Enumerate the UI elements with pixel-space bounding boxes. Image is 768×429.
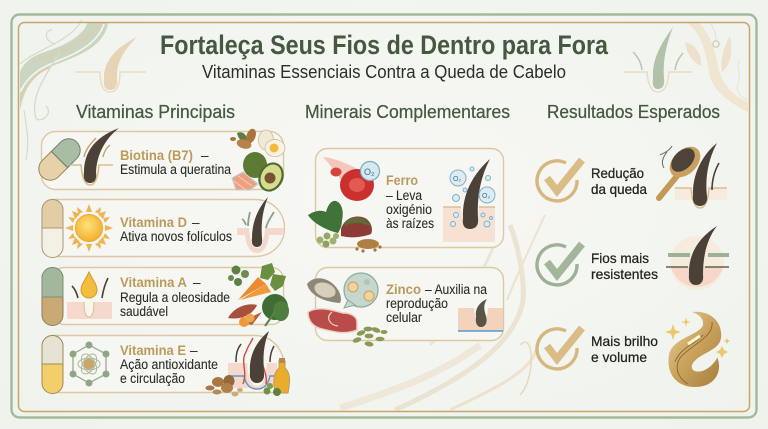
heading: minerais complementares: Minerais Complementares xyxy=(305,102,510,122)
text: vitamina e: e circulação xyxy=(120,371,185,386)
title: Fortaleça Seus Fios de Dentro para Fora xyxy=(160,30,609,60)
icon: pumpkin seeds xyxy=(352,326,388,347)
text: zinco xyxy=(386,281,487,325)
text: vitamina d xyxy=(120,214,232,244)
text: vitamina a: saudável xyxy=(120,304,168,319)
icon: hair growth xyxy=(70,128,119,185)
text: Fios mais xyxy=(591,250,649,266)
text: biotina: Estimula a queratina xyxy=(120,162,231,177)
icon: follicle with oxygen: O₂ xyxy=(482,193,490,200)
text xyxy=(591,165,647,197)
icon: capsule xyxy=(34,134,85,185)
icon: foods biotina xyxy=(230,127,287,194)
icon: molecule xyxy=(70,342,110,386)
text: vitamina a: Regula a oleosidade xyxy=(120,290,230,305)
panel: vitamina d xyxy=(42,197,284,258)
result: fios mais resistentes xyxy=(537,226,729,290)
icon: gold check xyxy=(537,328,582,369)
heading: resultados esperados: Resultados Esperados xyxy=(547,102,720,122)
icon: iron foods xyxy=(308,201,382,253)
icon: green check xyxy=(537,244,582,285)
text: ferro xyxy=(386,172,434,231)
result: reducao da queda xyxy=(537,141,727,208)
icon: follicle with oxygen xyxy=(443,159,495,242)
result: mais brilho e volume xyxy=(537,312,730,387)
icon: hair brush xyxy=(659,141,706,198)
text: vitamina e xyxy=(120,342,218,386)
icon: capsule xyxy=(42,336,63,394)
icon: shiny hair xyxy=(668,312,721,387)
icon: scalp circulation xyxy=(228,331,277,389)
text: vitamina d: Vitamina D xyxy=(120,214,187,230)
text: vitamina e: – xyxy=(190,343,198,358)
panel: zinco xyxy=(307,268,504,347)
text: vitamina e: Vitamina E xyxy=(120,342,186,358)
text: biotina: Biotina (B7) xyxy=(120,147,193,163)
icon: oil drop xyxy=(67,272,112,319)
icon: cells bubble xyxy=(344,273,378,308)
text: vitamina d: Ativa novos folículos xyxy=(120,229,232,244)
text: Mais brilho xyxy=(591,333,658,349)
icon: nuts and oil xyxy=(206,358,290,396)
text: vitamina a xyxy=(120,274,230,319)
icon: capsule xyxy=(42,268,63,326)
text: ferro: Ferro xyxy=(386,172,418,188)
text: zinco: reprodução xyxy=(386,296,448,311)
panel: biotina xyxy=(34,127,287,194)
icon: sparkles xyxy=(665,317,730,358)
panel: ferro xyxy=(308,148,504,253)
icon: follicle with oxygen: O₂ xyxy=(453,176,461,183)
text: biotina: – xyxy=(201,148,209,163)
subtitle: Vitaminas Essenciais Contra a Queda de Cabelo xyxy=(202,62,566,82)
panel: vitamina a xyxy=(42,263,289,327)
icon: sun xyxy=(65,204,113,252)
text: e volume xyxy=(591,349,647,365)
icon: capsule xyxy=(42,200,63,258)
decorative follicle left xyxy=(75,37,146,92)
panel: vitamina e xyxy=(42,331,290,396)
text: zinco: celular xyxy=(386,310,422,325)
heading: vitaminas principais: Vitaminas Principais xyxy=(76,102,235,122)
text xyxy=(591,250,658,282)
text: biotina xyxy=(120,147,231,177)
text: Redução xyxy=(591,165,644,181)
icon: red blood cells xyxy=(323,157,380,201)
icon: strong hair xyxy=(666,226,729,290)
text: resistentes xyxy=(591,266,658,282)
text: da queda xyxy=(591,181,647,197)
icon: red meat xyxy=(308,309,357,333)
text: ferro: às raízes xyxy=(386,216,434,231)
icon: skin follicle xyxy=(458,299,503,331)
text: zinco: Zinco xyxy=(386,281,421,297)
icon: red blood cells: O₂ xyxy=(364,167,375,177)
text xyxy=(591,333,658,365)
text: vitamina e: Ação antioxidante xyxy=(120,357,218,372)
icon: follicle xyxy=(675,143,727,208)
text: vitamina a: Vitamina A xyxy=(120,274,187,290)
text: vitamina a: – xyxy=(193,275,201,290)
icon: foods vitamina a xyxy=(228,263,289,327)
text: ferro: oxigénio xyxy=(386,202,432,217)
text: ferro: – Leva xyxy=(386,188,422,203)
decorative follicle right xyxy=(624,27,731,92)
icon: gold check xyxy=(537,160,582,201)
icon: follicle xyxy=(237,197,284,253)
text: vitamina d: – xyxy=(192,215,200,230)
icon: oyster xyxy=(307,278,341,303)
text: zinco: – Auxilia na xyxy=(425,282,487,297)
